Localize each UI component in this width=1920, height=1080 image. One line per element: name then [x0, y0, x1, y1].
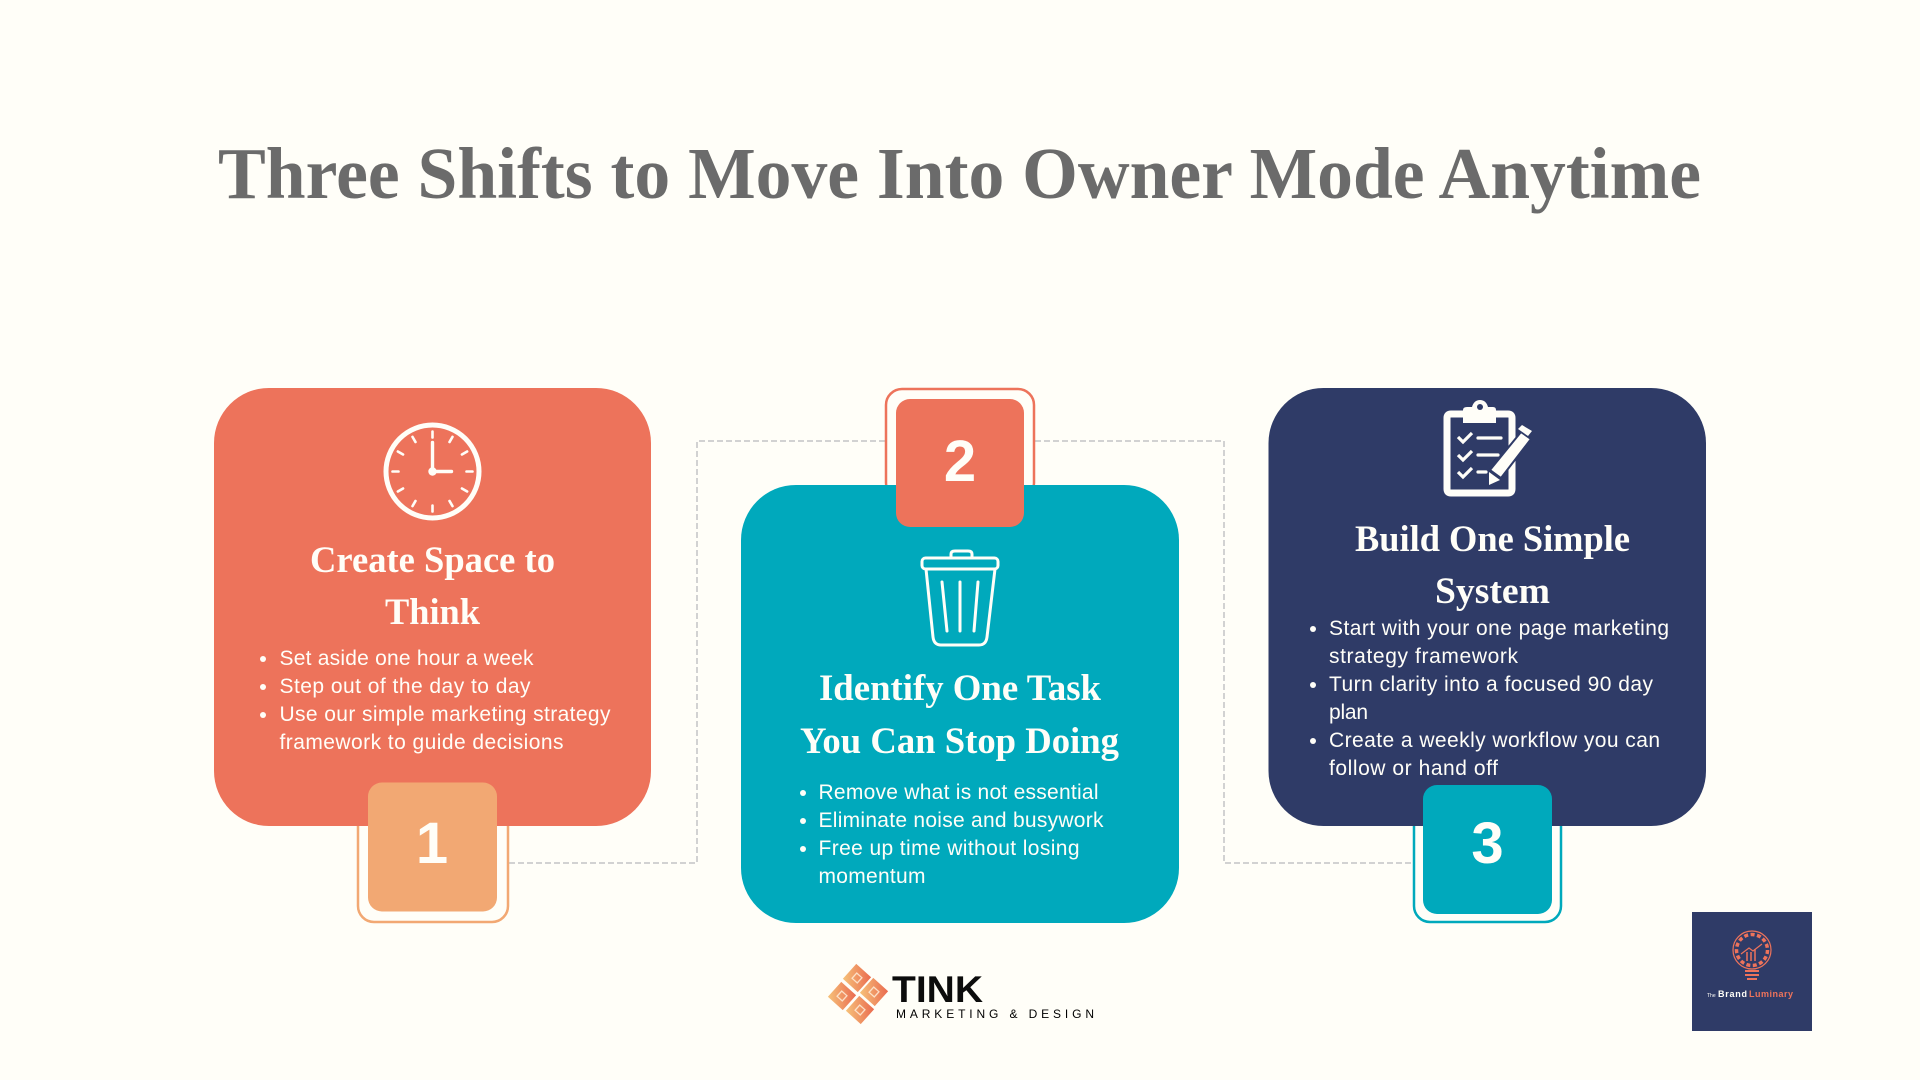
badge 2: 2: [944, 429, 976, 494]
bullet list: create space to think: Step out of the day to day: [280, 675, 531, 698]
heading: build one simple system: Build One Simple: [1355, 519, 1630, 560]
logo: the brand luminary: [1692, 912, 1812, 1031]
logo: the brand luminary: The: [1707, 993, 1716, 999]
badge outline 2: [886, 389, 1034, 499]
bullet list: create space to think: [260, 647, 611, 754]
bullet list: identify one task: Free up time without losing: [818, 837, 1080, 860]
badge 2: [896, 399, 1024, 527]
icon: clipboard and pencil: [1447, 400, 1532, 493]
heading: build one simple system: [1355, 519, 1630, 612]
badge 1: [368, 782, 497, 912]
logo: tink marketing and design: TINK: [892, 969, 983, 1010]
bullet list: build one simple system: [1310, 617, 1669, 780]
panel: identify one task: [741, 485, 1179, 923]
logo: tink marketing and design: MARKETING & DESIGN: [896, 1007, 1094, 1021]
icon: clock: [386, 425, 479, 518]
bullet list: create space to think: Set aside one hour a week: [280, 647, 534, 670]
heading: build one simple system: System: [1435, 571, 1550, 612]
title: Three Shifts to Move Into Owner Mode Anytime: [218, 133, 1701, 214]
heading: identify one task: Identify One Task: [819, 668, 1101, 709]
icon: four diamonds: [828, 964, 888, 1024]
logo: the brand luminary: Brand: [1718, 989, 1747, 999]
icon: bulb with gear: [1733, 931, 1771, 979]
bullet list: build one simple system: Start with your one page marketing: [1329, 617, 1669, 640]
bullet list: identify one task: momentum: [818, 865, 926, 888]
bullet list: build one simple system: Create a weekly workflow you can: [1329, 729, 1660, 752]
logo: tink marketing and design: [828, 964, 1094, 1024]
heading: create space to think: [310, 540, 555, 633]
bullet list: identify one task: Remove what is not essential: [818, 781, 1098, 804]
icon: trash can: [922, 551, 998, 645]
badge 3: [1423, 785, 1552, 914]
badge outline 1: [358, 760, 508, 922]
connector: step 2 to step 3: [1035, 441, 1413, 863]
bullet list: identify one task: Eliminate noise and busywork: [818, 809, 1104, 832]
connector: step 1 to step 2: [509, 441, 885, 863]
bullet list: identify one task: [800, 781, 1104, 888]
logo: the brand luminary: Luminary: [1749, 989, 1793, 999]
heading: identify one task: You Can Stop Doing: [800, 721, 1119, 762]
heading: identify one task: [800, 668, 1119, 762]
badge 3: 3: [1471, 811, 1504, 876]
heading: create space to think: Create Space to: [310, 540, 555, 581]
bullet list: build one simple system: plan: [1329, 701, 1368, 724]
panel: build one simple system: [1268, 388, 1706, 826]
bullet list: build one simple system: follow or hand off: [1329, 757, 1498, 780]
badge outline 3: [1414, 760, 1561, 922]
badge 1: 1: [416, 811, 448, 876]
bullet list: create space to think: Use our simple marketing strategy: [280, 703, 611, 726]
panel: create space to think: [214, 388, 651, 826]
bullet list: build one simple system: Turn clarity into a focused 90 day: [1329, 673, 1654, 696]
bullet list: build one simple system: strategy framework: [1329, 645, 1518, 668]
heading: create space to think: Think: [385, 592, 480, 633]
bullet list: create space to think: framework to guide decisions: [280, 731, 564, 754]
